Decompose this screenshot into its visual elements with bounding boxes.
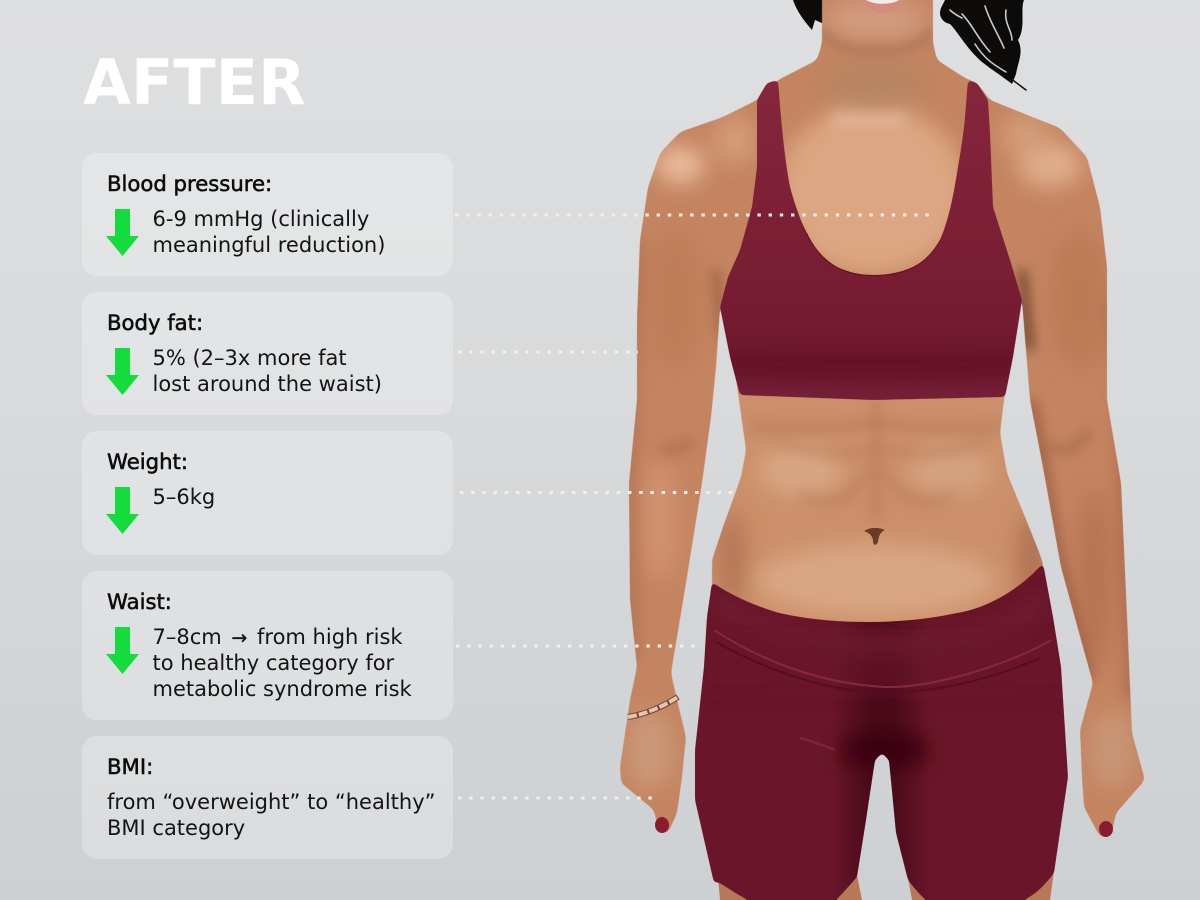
panel: BMI [82, 736, 453, 859]
arms, shoulders, chest and neck [600, 0, 1160, 860]
leg skin below shorts [718, 871, 1054, 900]
panel: body fat [82, 292, 453, 415]
text: waist value: 7–8cm → from high risk [152, 625, 403, 649]
panel: weight [82, 431, 453, 555]
text: blood pressure value [152, 207, 385, 257]
heading: waist: Waist: [107, 589, 172, 614]
text: waist value [152, 625, 412, 701]
text: body fat value: lost around the waist) [152, 372, 382, 396]
dotted leader lines [455, 215, 929, 798]
hair [793, 0, 1026, 90]
shorts [695, 563, 1068, 900]
text: BMI value: BMI category [107, 816, 245, 840]
heading: weight: Weight: [107, 449, 188, 474]
icon: green down arrow [106, 487, 139, 534]
bra hem and neckline shading [734, 233, 1010, 370]
text: body fat value: 5% (2–3x more fat [152, 346, 347, 370]
text: blood pressure value: meaningful reduction) [152, 233, 385, 257]
heading: blood pressure: Blood pressure: [107, 171, 272, 196]
nails [655, 817, 669, 833]
navel [864, 528, 885, 545]
text: blood pressure value: 6-9 mmHg (clinically [152, 207, 369, 231]
text: body fat value [152, 346, 382, 396]
heading: BMI: BMI: [107, 754, 153, 779]
icon: green down arrow [106, 627, 139, 674]
text: waist value: metabolic syndrome risk [152, 677, 412, 701]
panel: blood pressure [82, 153, 453, 276]
shorts shading and waistband [700, 600, 1070, 768]
lips and teeth [860, 0, 904, 13]
text: weight value: 5–6kg [152, 485, 215, 509]
text: BMI value [107, 790, 436, 840]
bracelet [628, 697, 678, 717]
text: waist value: to healthy category for [152, 651, 394, 675]
torso skin [712, 378, 1044, 622]
icon: green down arrow [106, 348, 139, 395]
title: AFTER [83, 46, 306, 119]
panel: waist [82, 571, 453, 720]
text: BMI value: from “overweight” to “healthy” [107, 790, 436, 814]
sports bra [720, 80, 1022, 400]
heading: body fat: Body fat: [107, 310, 203, 335]
icon: green down arrow [106, 209, 139, 256]
